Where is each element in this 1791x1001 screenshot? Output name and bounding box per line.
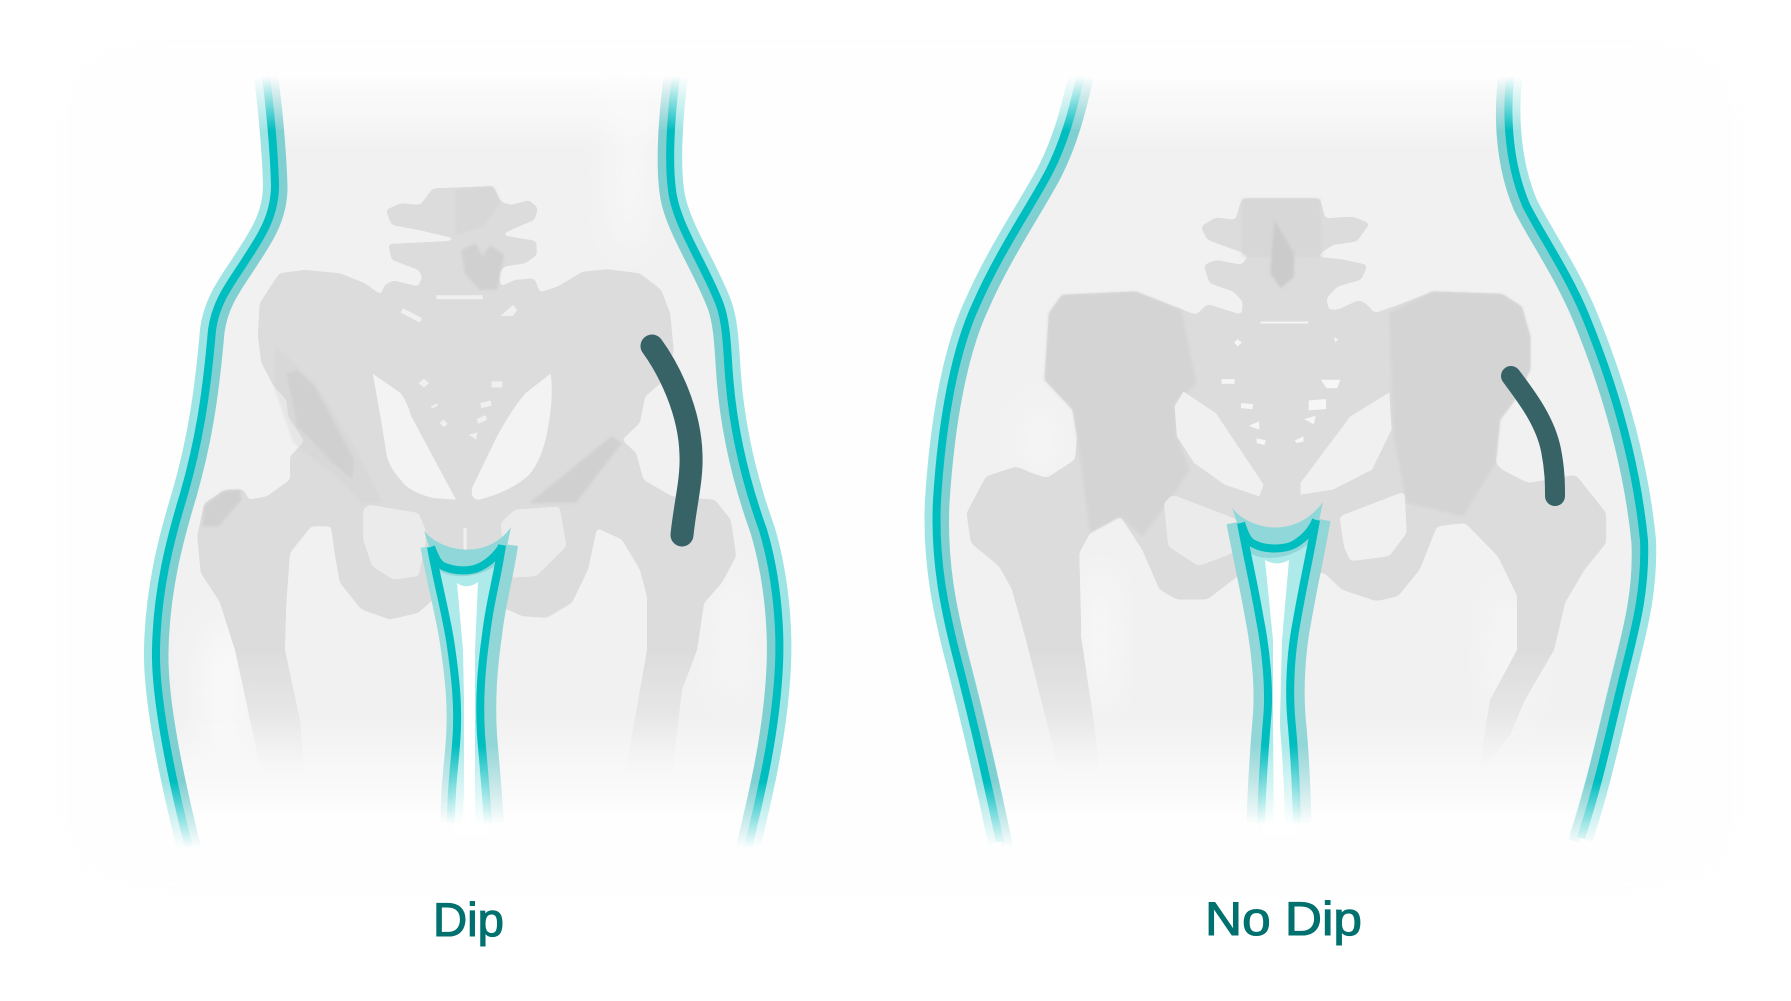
femur shafts: [1012, 590, 1565, 775]
dark muscle bar: [1511, 376, 1555, 496]
white slit: [457, 582, 478, 830]
crotch curve fill: [424, 527, 511, 576]
shaded bone areas: [202, 186, 622, 526]
right contour: [1501, 70, 1644, 841]
panel: no dip: [936, 70, 1644, 945]
crotch curve fill: [1232, 502, 1323, 558]
dark muscle bar: [652, 346, 691, 535]
left contour: [936, 70, 1089, 845]
pelvis bones: [197, 186, 736, 650]
shaded bone areas: [1045, 198, 1530, 536]
obturator openings: [363, 505, 567, 580]
inner thigh lines: [1232, 502, 1324, 830]
right contour: [663, 70, 779, 854]
body silhouette: [949, 124, 1632, 758]
crotch dark curve: [431, 547, 502, 570]
sacral foramina: [401, 295, 517, 560]
white gap between thighs: [452, 600, 488, 835]
waist and hip contour lines: [936, 70, 1644, 845]
obturator openings: [1164, 491, 1407, 566]
sacral foramina: [1222, 322, 1340, 445]
white slit: [1265, 560, 1289, 800]
waist and hip contour lines: [156, 70, 779, 854]
crotch dark curve: [1241, 520, 1316, 548]
label: Dip: Dip: [433, 893, 504, 946]
pelvic inlet openings: [1175, 391, 1392, 496]
label: No Dip: No Dip: [1205, 892, 1362, 945]
white gap between thighs: [1262, 600, 1297, 835]
body silhouette: [168, 124, 767, 750]
pelvis bones: [967, 198, 1606, 650]
inner thigh lines: [424, 527, 511, 830]
panel: dip: [156, 70, 779, 946]
femur shafts: [220, 596, 704, 775]
pelvic inlet openings: [373, 374, 552, 500]
left contour: [156, 70, 282, 850]
